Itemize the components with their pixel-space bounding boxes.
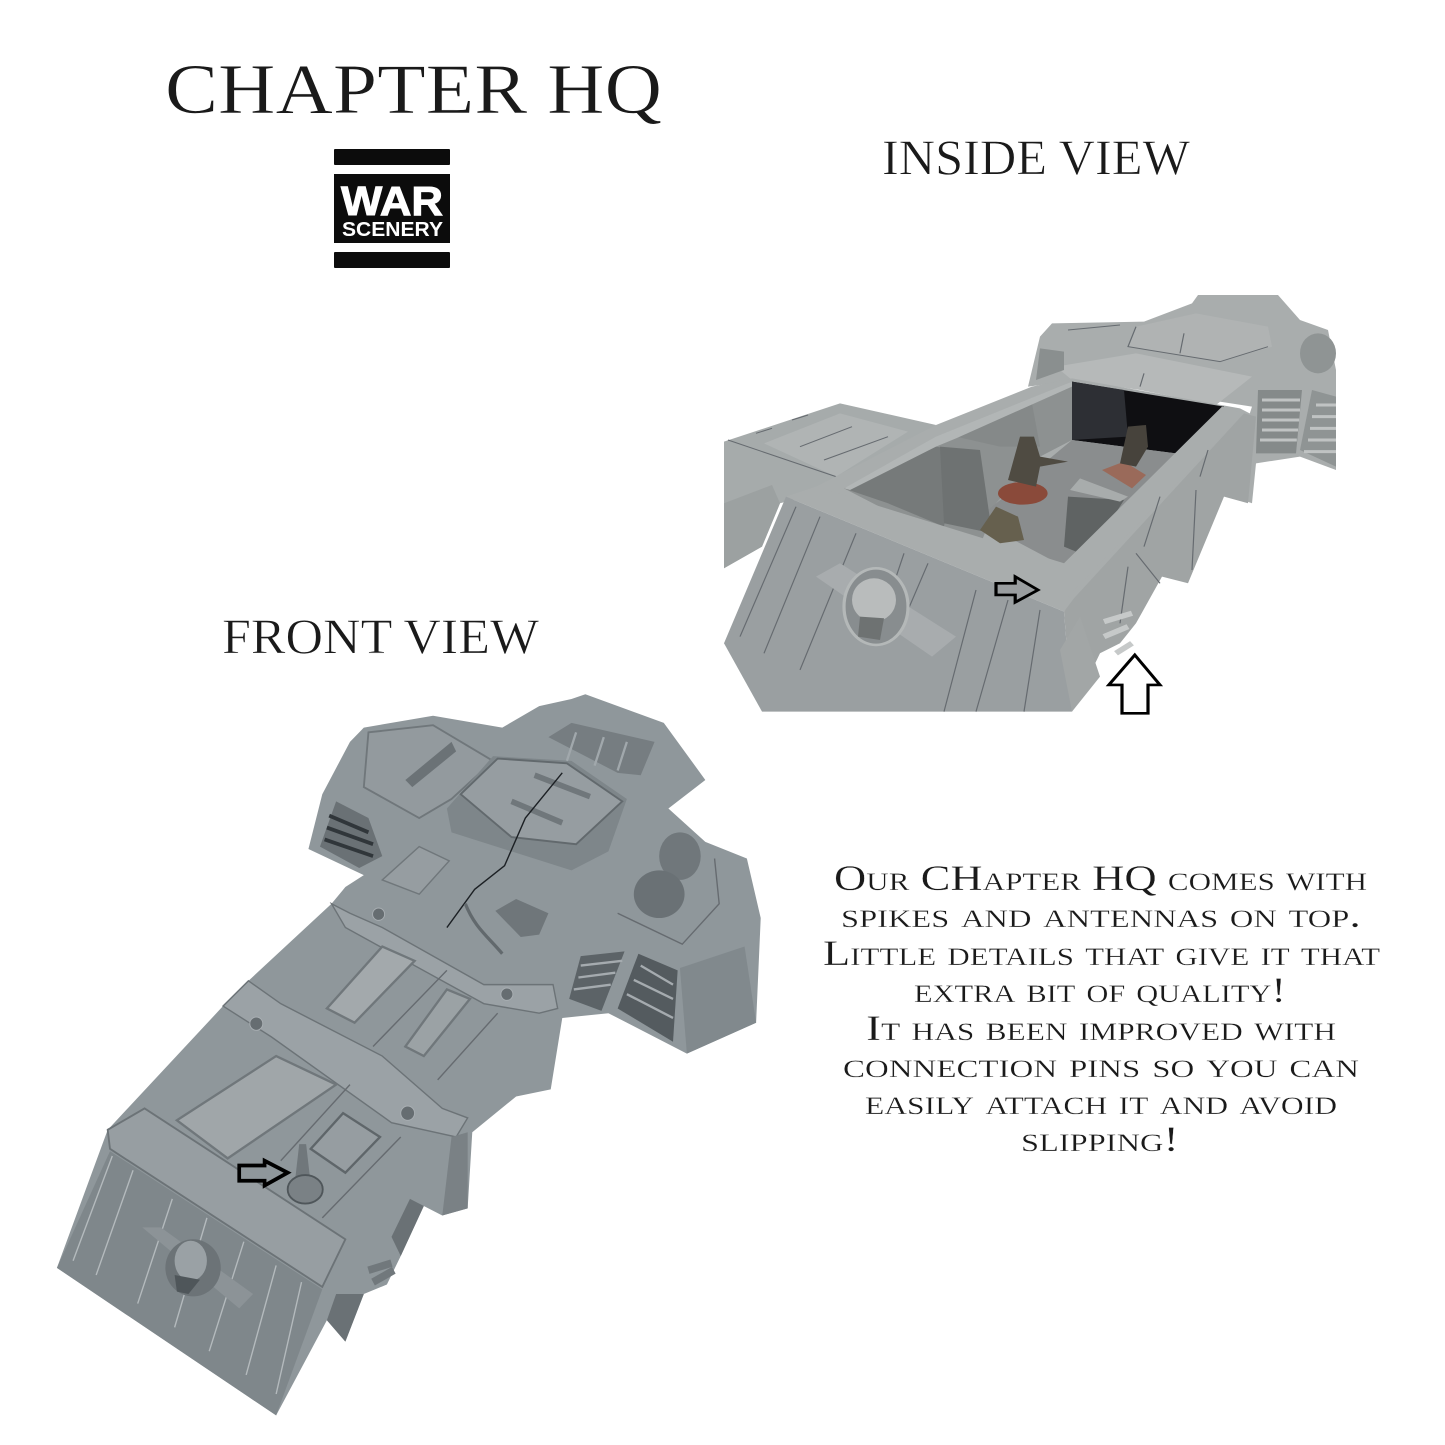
beam spikes	[145, 908, 513, 1241]
roof beams	[332, 904, 558, 1013]
title: CHAPTER HQ	[165, 51, 662, 129]
ramp front with skull	[724, 497, 1072, 712]
description text block: It has been improved with	[866, 1008, 1336, 1048]
rear building	[1028, 295, 1336, 503]
arrow: connector pin	[1109, 655, 1160, 713]
heading: front view: FRONT VIEW	[222, 608, 540, 664]
side clips	[327, 1294, 364, 1342]
logo: War Scenery: WAR	[341, 178, 443, 224]
room interior: dark back wall and floor	[1072, 382, 1224, 453]
miniature soldiers	[980, 425, 1148, 543]
photo: inside view of model	[724, 295, 1336, 712]
heading: inside view: INSIDE VIEW	[882, 129, 1191, 185]
description text block	[823, 858, 1380, 1159]
deck panel	[382, 847, 449, 894]
description text block: connection pins so you can	[843, 1045, 1359, 1085]
photo: front view of model	[57, 694, 761, 1415]
roof recessed panels	[327, 947, 415, 1023]
front beam	[108, 1108, 345, 1287]
rear deck	[364, 725, 493, 818]
arrow: corner pin	[996, 577, 1038, 602]
wall tops	[844, 382, 1072, 490]
right outer wall	[1064, 413, 1256, 712]
side vents	[569, 951, 625, 1011]
domes	[659, 832, 701, 880]
left rear section	[724, 403, 936, 568]
antenna	[295, 1144, 311, 1185]
logo: War Scenery	[334, 149, 450, 268]
arrow: antenna	[239, 1161, 288, 1186]
description text block: extra bit of quality!	[914, 970, 1286, 1010]
model silhouette	[57, 694, 761, 1415]
description text block: easily attach it and avoid	[865, 1082, 1337, 1122]
description text block: spikes and antennas on top.	[841, 895, 1361, 935]
logo: War Scenery: SCENERY	[342, 219, 444, 241]
description text block: slipping!	[1021, 1119, 1179, 1159]
description text block: Our CHapter HQ comes with	[834, 858, 1367, 898]
ramp front face	[57, 1151, 322, 1415]
description text block: Little details that give it that	[823, 933, 1380, 973]
model base under room	[786, 378, 1256, 610]
central raised roof	[447, 756, 627, 870]
connection pins	[1104, 613, 1132, 653]
